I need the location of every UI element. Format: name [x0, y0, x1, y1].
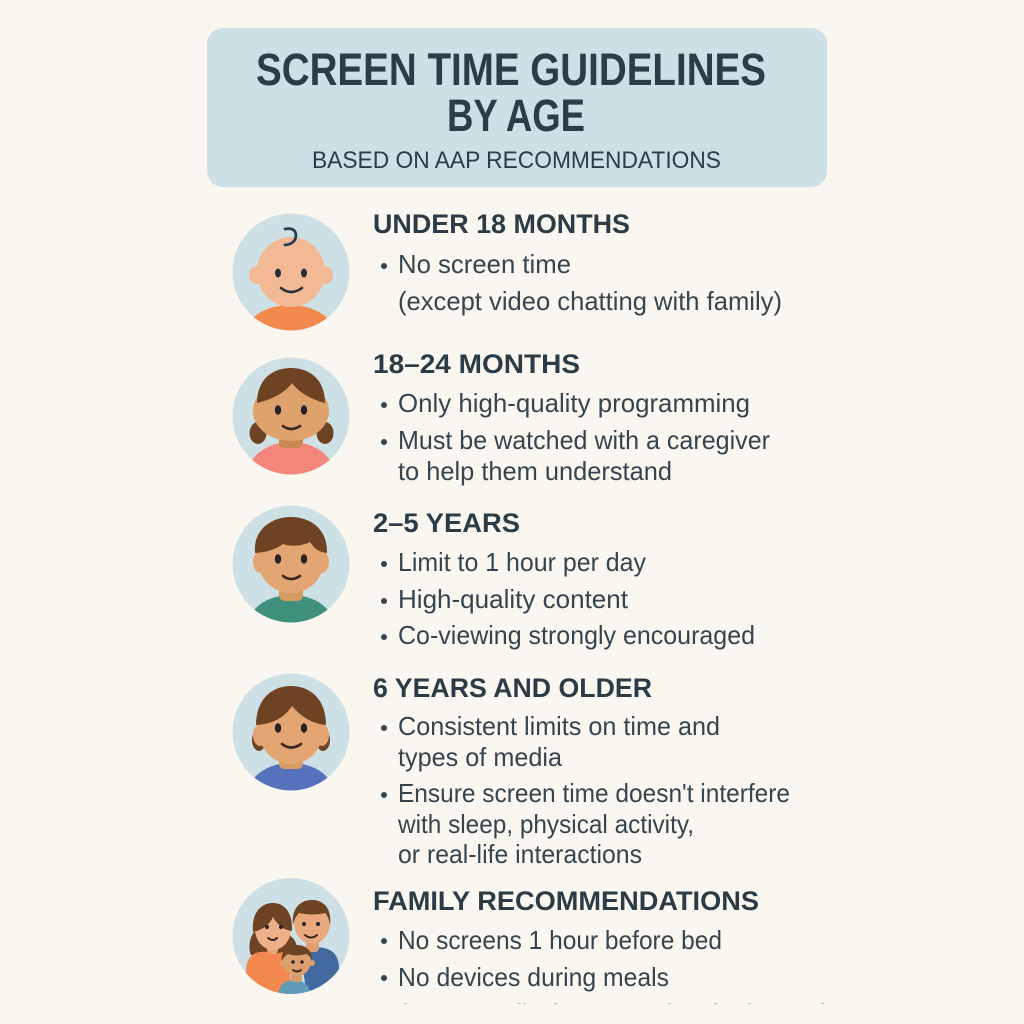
bullet list	[381, 547, 755, 650]
icon: family	[232, 878, 350, 998]
panel: title banner	[207, 28, 827, 187]
bullet list: No screens 1 hour before bed	[398, 925, 722, 955]
section: 6 years and older	[232, 673, 790, 869]
bullet list: to help them understand	[398, 456, 672, 486]
bullet list	[381, 388, 770, 486]
bullet list: No screen time	[398, 249, 571, 279]
bullet list	[381, 925, 722, 992]
bullet list	[381, 249, 782, 316]
bullet list: or real-life interactions	[398, 839, 642, 869]
heading: 18–24 MONTHS	[373, 349, 580, 379]
subtitle: BASED ON AAP RECOMMENDATIONS	[312, 147, 721, 174]
section: under 18 months	[232, 214, 780, 330]
bullet list: with sleep, physical activity,	[397, 809, 694, 839]
bullet list: Limit to 1 hour per day	[398, 547, 646, 577]
title: BY AGE	[447, 90, 585, 141]
heading: FAMILY RECOMMENDATIONS	[373, 886, 759, 916]
bullet list	[381, 711, 790, 869]
bullet list: Must be watched with a caregiver	[398, 425, 770, 455]
bullet list: types of media	[398, 742, 563, 772]
mother's hair lobes	[249, 932, 297, 955]
bullet list: (except video chatting with family)	[398, 286, 782, 316]
icon: baby	[232, 214, 350, 330]
bullet list: No devices during meals	[398, 962, 669, 992]
heading: 6 YEARS AND OLDER	[373, 673, 652, 703]
heading: 2–5 YEARS	[373, 508, 520, 538]
bullet list: Ensure screen time doesn't interfere	[398, 778, 790, 808]
bullet list: Consistent limits on time and	[398, 711, 720, 741]
section: family recommendations	[232, 878, 759, 998]
icon: older child	[232, 674, 350, 790]
icon: toddler girl	[232, 358, 350, 474]
section: 2-5 years	[232, 506, 755, 653]
child's shirt	[278, 980, 310, 994]
bullet list: Only high-quality programming	[398, 388, 750, 418]
title: SCREEN TIME GUIDELINES	[256, 44, 766, 95]
father's shirt	[304, 947, 339, 992]
heading: UNDER 18 MONTHS	[373, 209, 630, 239]
icon: young boy	[232, 506, 350, 622]
section: 18-24 months	[232, 354, 770, 486]
title	[256, 44, 766, 141]
bullet list: High-quality content	[398, 584, 629, 614]
mother's shirt	[246, 952, 293, 996]
bullet list: Co-viewing strongly encouraged	[398, 620, 755, 650]
